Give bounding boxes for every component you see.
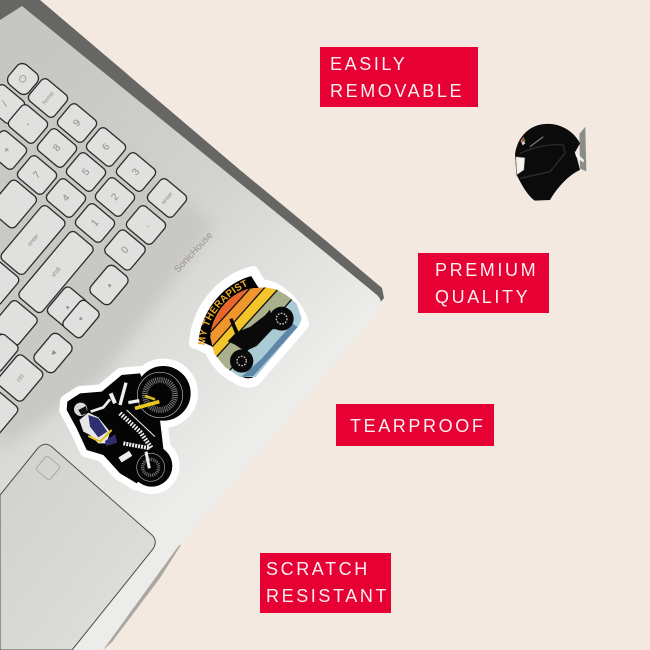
helmet fin xyxy=(579,127,586,171)
label: easily removable: EASILY xyxy=(330,54,407,74)
keyboard keys: ◀ xyxy=(50,350,58,357)
keyboard keys: . xyxy=(141,221,151,230)
sticker: my therapist xyxy=(189,266,309,388)
yellow axle mark xyxy=(145,396,155,399)
keyboard keys: 7 xyxy=(31,169,44,181)
top vent xyxy=(530,137,543,147)
visor seal xyxy=(520,145,565,178)
label: easily removable: REMOVABLE xyxy=(330,81,464,101)
keyboard keys: 0 xyxy=(119,244,132,256)
label: premium quality xyxy=(418,253,549,313)
keyboard keys: home xyxy=(42,90,56,106)
fin stripe xyxy=(575,151,584,163)
laptop shadow xyxy=(0,0,384,315)
label: premium quality: PREMIUM xyxy=(435,260,538,280)
sticker outline xyxy=(194,271,304,383)
keyboard keys: ctrl xyxy=(16,374,26,384)
label: easily removable xyxy=(320,47,478,107)
flag badge xyxy=(521,137,525,145)
label: tearproof: TEARPROOF xyxy=(350,416,485,436)
sticker white outline xyxy=(67,366,191,487)
keyboard keys: 3 xyxy=(130,166,143,178)
keyboard keys: enter xyxy=(161,191,174,206)
keyboard keys: 5 xyxy=(80,166,93,178)
keyboard keys: enter xyxy=(27,233,40,248)
keyboard keys: 2 xyxy=(109,191,122,203)
keyboard keys: ▼ xyxy=(78,315,86,324)
keyboard keys: ▲ xyxy=(64,303,72,312)
keyboard keys: 6 xyxy=(100,141,113,153)
sticker black base xyxy=(67,366,191,487)
trackpad xyxy=(0,444,155,650)
keyboard keys: 4 xyxy=(60,192,73,204)
sticker: helmet xyxy=(515,124,586,201)
bike frame xyxy=(111,383,155,468)
sticker: motocross rider xyxy=(67,366,191,487)
keyboard keys: / xyxy=(0,100,11,109)
lower shadow xyxy=(95,545,181,650)
keyboard keys: ⏻ xyxy=(17,73,30,86)
sticker title: MY THERAPIST xyxy=(198,279,246,345)
laptop xyxy=(0,0,384,650)
label: scratch resistant: SCRATCH xyxy=(266,559,370,579)
laptop body xyxy=(0,6,381,650)
rider xyxy=(74,399,117,446)
keyboard keys: + xyxy=(1,144,14,156)
keyboard keys: 9 xyxy=(71,117,84,129)
rear wheel xyxy=(137,372,183,418)
brand logo: SonicHouse xyxy=(172,230,215,275)
label: tearproof xyxy=(336,404,494,446)
keyboard keys: ▲ xyxy=(106,281,114,290)
keyboard deck xyxy=(0,60,215,450)
helmet shell xyxy=(515,124,580,201)
sunset stripes xyxy=(210,287,302,377)
visor xyxy=(516,157,525,175)
label: scratch resistant xyxy=(260,553,391,613)
keyboard keys: 1 xyxy=(89,217,102,229)
label: premium quality: QUALITY xyxy=(435,287,530,307)
keyboard keys: 8 xyxy=(51,142,64,154)
keyboard keys: shift xyxy=(51,266,63,279)
yellow swingarm xyxy=(135,402,159,408)
keyboard keys: - xyxy=(23,120,34,129)
keyboard keys xyxy=(0,61,189,438)
motorcycle silhouette xyxy=(228,307,294,373)
front wheel xyxy=(137,453,165,481)
trackpad button xyxy=(35,455,61,481)
ground strip xyxy=(241,324,298,377)
label: scratch resistant: RESISTANT xyxy=(266,586,389,606)
